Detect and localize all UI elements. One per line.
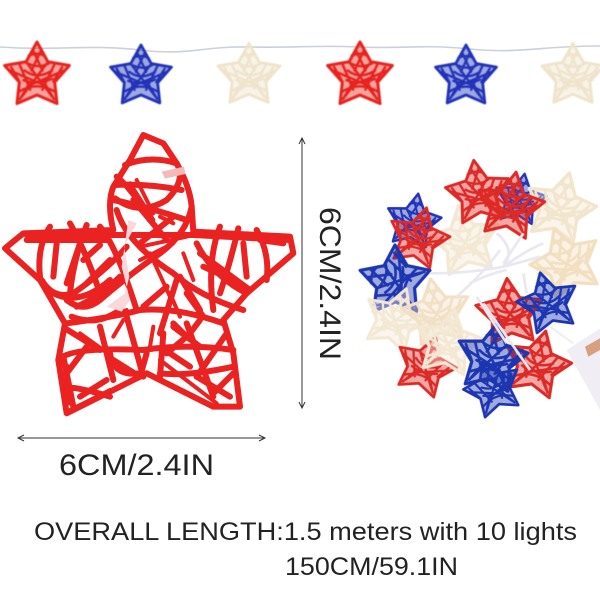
star: blue (456, 350, 528, 421)
star: red (497, 323, 578, 401)
vertical dimension arrow (299, 138, 305, 408)
star: cream (411, 303, 487, 377)
star: blue (511, 265, 584, 336)
horizontal dimension arrow (18, 435, 265, 441)
large red star (5, 135, 293, 413)
cluster of star lights (349, 156, 600, 421)
star: cream (398, 273, 474, 347)
string wire (0, 46, 600, 52)
star: red (442, 156, 514, 224)
star: cream (519, 164, 600, 246)
star: red (472, 166, 549, 240)
star: cream (424, 199, 505, 277)
star: red (388, 327, 464, 401)
star: blue (111, 45, 171, 103)
top row of stars (5, 42, 600, 104)
metric length text: 150CM/59.1IN (285, 553, 458, 581)
star: red (5, 42, 69, 104)
star: cream (356, 278, 436, 356)
star: cream (218, 44, 280, 102)
wire bundle (430, 233, 543, 370)
star: red (383, 200, 456, 271)
star: blue (349, 237, 434, 324)
star: blue (491, 169, 550, 226)
star: blue (383, 189, 445, 249)
star: blue (436, 45, 496, 103)
wires and battery (550, 327, 600, 410)
width label: 6CM/2.4IN (59, 449, 214, 482)
star: red (474, 276, 546, 344)
height label: 6CM/2.4IN (313, 207, 346, 360)
star: blue (452, 316, 532, 394)
tag on star (162, 167, 185, 179)
star: red (328, 42, 392, 104)
overall length text: OVERALL LENGTH:1.5 meters with 10 lights (34, 518, 577, 546)
star: cream (521, 217, 600, 303)
LED tube (107, 220, 137, 312)
star: cream (542, 44, 600, 102)
